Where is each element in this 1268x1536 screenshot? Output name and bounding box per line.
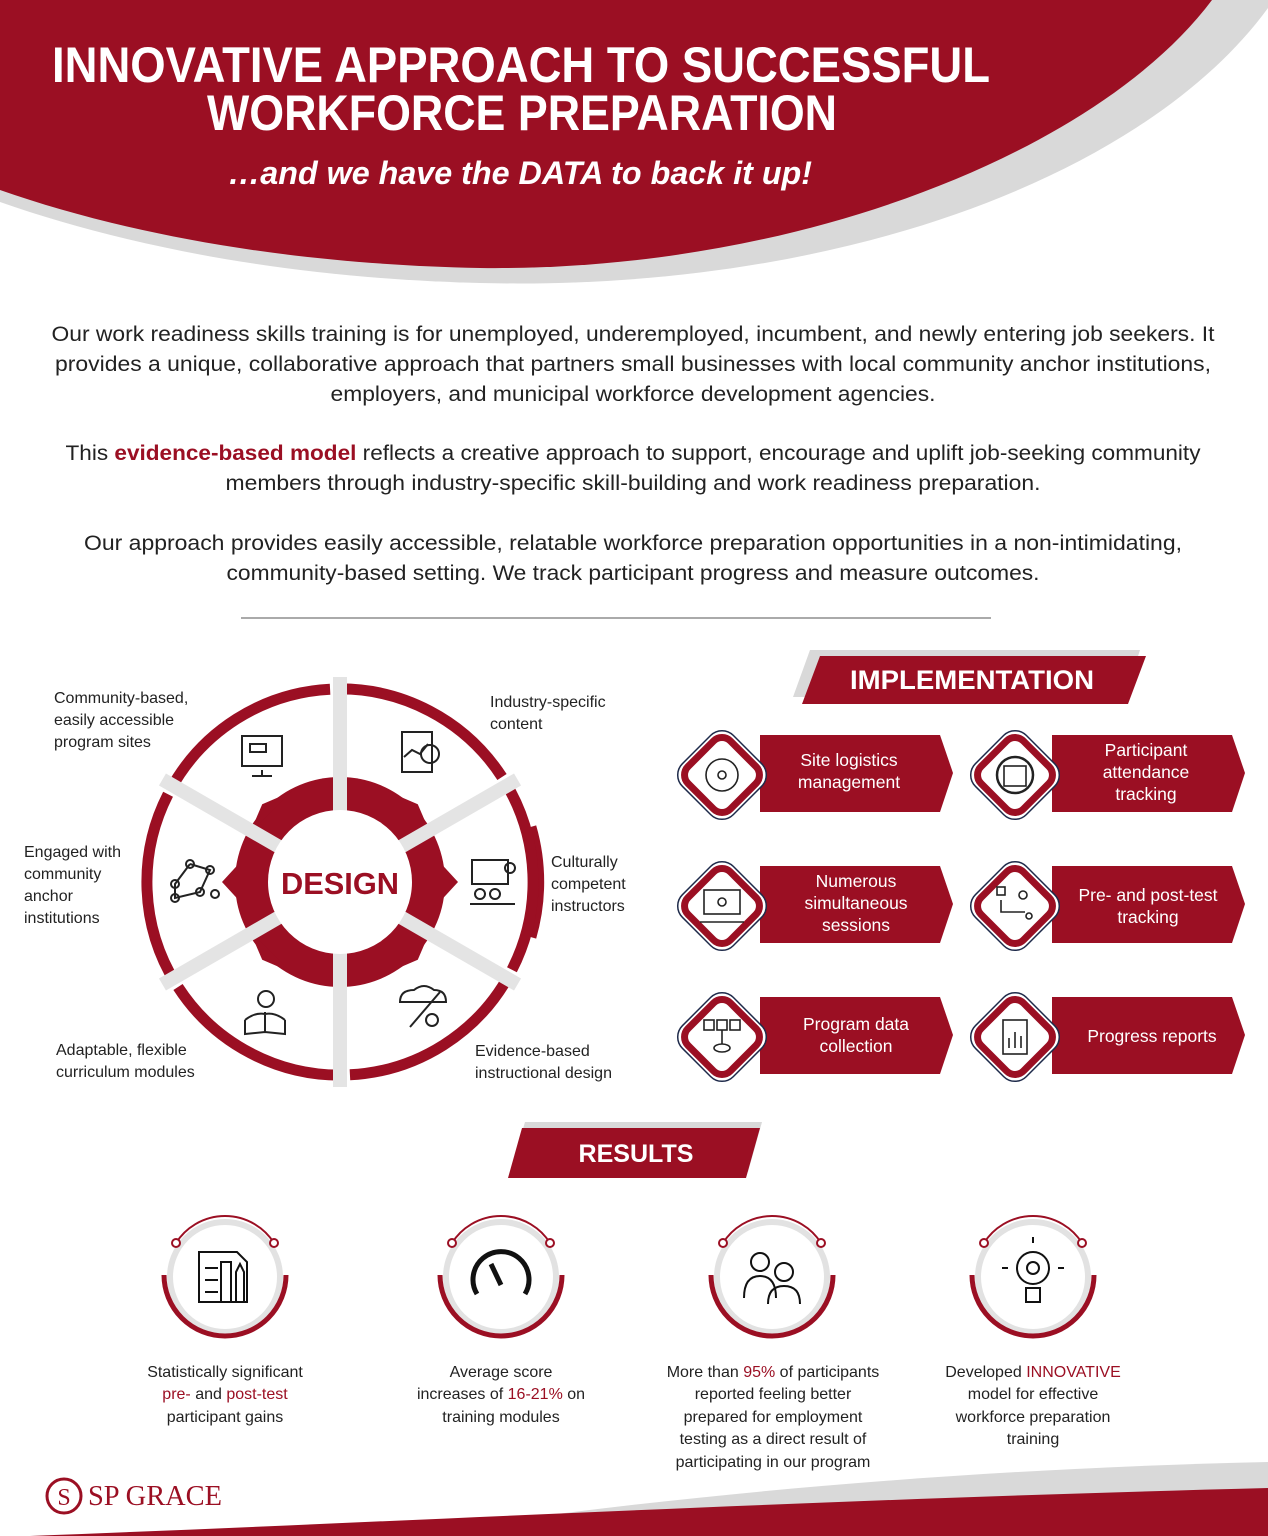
intro text: employers, and municipal workforce development agencies. [330,383,936,406]
wheel labels: Evidence-based [475,1043,590,1060]
implementation items: Participant [1105,740,1187,760]
results text: Statistically significant [147,1364,303,1381]
intro text: provides a unique, collaborative approach that partners small businesses with local community anchor institutions, [55,353,1211,376]
wheel labels: anchor [24,888,74,905]
results text: training [1007,1431,1059,1448]
implementation items [671,724,1245,1088]
implementation banner: IMPLEMENTATION [850,665,1094,695]
implementation items: tracking [1115,784,1177,804]
implementation items: Numerous [816,871,897,891]
header background [0,0,1268,283]
wheel labels: competent [551,876,626,893]
subtitle: …and we have the DATA to back it up! [228,155,812,191]
title: INNOVATIVE APPROACH TO SUCCESSFUL [52,37,990,93]
results text: testing as a direct result of [680,1431,867,1448]
intro text: community-based setting. We track participant progress and measure outcomes. [226,562,1040,585]
results text: workforce preparation [955,1409,1110,1426]
wheel labels: instructors [551,898,625,915]
results text: Average score [450,1364,553,1381]
implementation icons [700,757,1033,1054]
results icons [164,1216,1094,1336]
results text: reported feeling better [695,1386,852,1403]
wheel labels: easily accessible [54,712,174,729]
intro text [52,323,1215,585]
results banner [508,1122,762,1178]
implementation items: Site logistics [800,750,898,770]
intro text: Our approach provides easily accessible, relatable workforce preparation opportunities in a non-intimidating, [84,532,1182,555]
gear [222,777,458,987]
logo [47,1479,222,1513]
results text: prepared for employment [684,1409,863,1426]
intro text: members through industry-specific skill-building and work readiness preparation. [226,472,1040,495]
results text: model for effective [968,1386,1098,1403]
results text: participant gains [167,1409,283,1426]
intro text: Our work readiness skills training is for unemployed, underemployed, incumbent, and newly entering job seekers. It [52,323,1215,346]
design wheel [92,645,588,1119]
wheel icons [171,732,515,1034]
wheel labels: community [24,866,101,883]
implementation items: collection [820,1036,892,1056]
logo: S [57,1485,71,1511]
title [52,37,990,141]
results text: More than 95% of participants [667,1364,879,1381]
results text: increases of 16-21% on [417,1386,585,1403]
logo: SP GRACE [88,1481,222,1512]
implementation items: Program data [803,1014,909,1034]
wheel labels: Community-based, [54,690,188,707]
implementation banner [793,650,1146,704]
implementation items: management [798,772,900,792]
implementation items: sessions [822,915,890,935]
implementation items: tracking [1117,907,1179,927]
results text [147,1364,1121,1471]
wheel labels: Engaged with [24,844,121,861]
wheel labels: institutions [24,910,100,927]
wheel labels: program sites [54,734,151,751]
results banner: RESULTS [578,1140,694,1168]
implementation items: attendance [1103,762,1189,782]
implementation items: simultaneous [804,893,908,913]
wheel labels: instructional design [475,1065,612,1082]
results text: pre- and post-test [162,1386,288,1403]
results text: participating in our program [676,1454,870,1471]
wheel labels: Industry-specific [490,694,606,711]
results text: Developed INNOVATIVE [945,1364,1121,1381]
implementation items: Pre- and post-test [1078,885,1218,905]
intro text: This evidence-based model reflects a creative approach to support, encourage and uplift job-seeking community [66,442,1201,465]
footer waves [30,1462,1268,1536]
title: WORKFORCE PREPARATION [207,85,837,141]
wheel labels [24,690,626,1082]
implementation items: Progress reports [1087,1026,1217,1046]
wheel labels: content [490,716,543,733]
wheel labels: Adaptable, flexible [56,1042,187,1059]
wheel labels: Culturally [551,854,618,871]
design label: DESIGN [281,866,399,901]
wheel labels: curriculum modules [56,1064,195,1081]
results text: training modules [442,1409,560,1426]
